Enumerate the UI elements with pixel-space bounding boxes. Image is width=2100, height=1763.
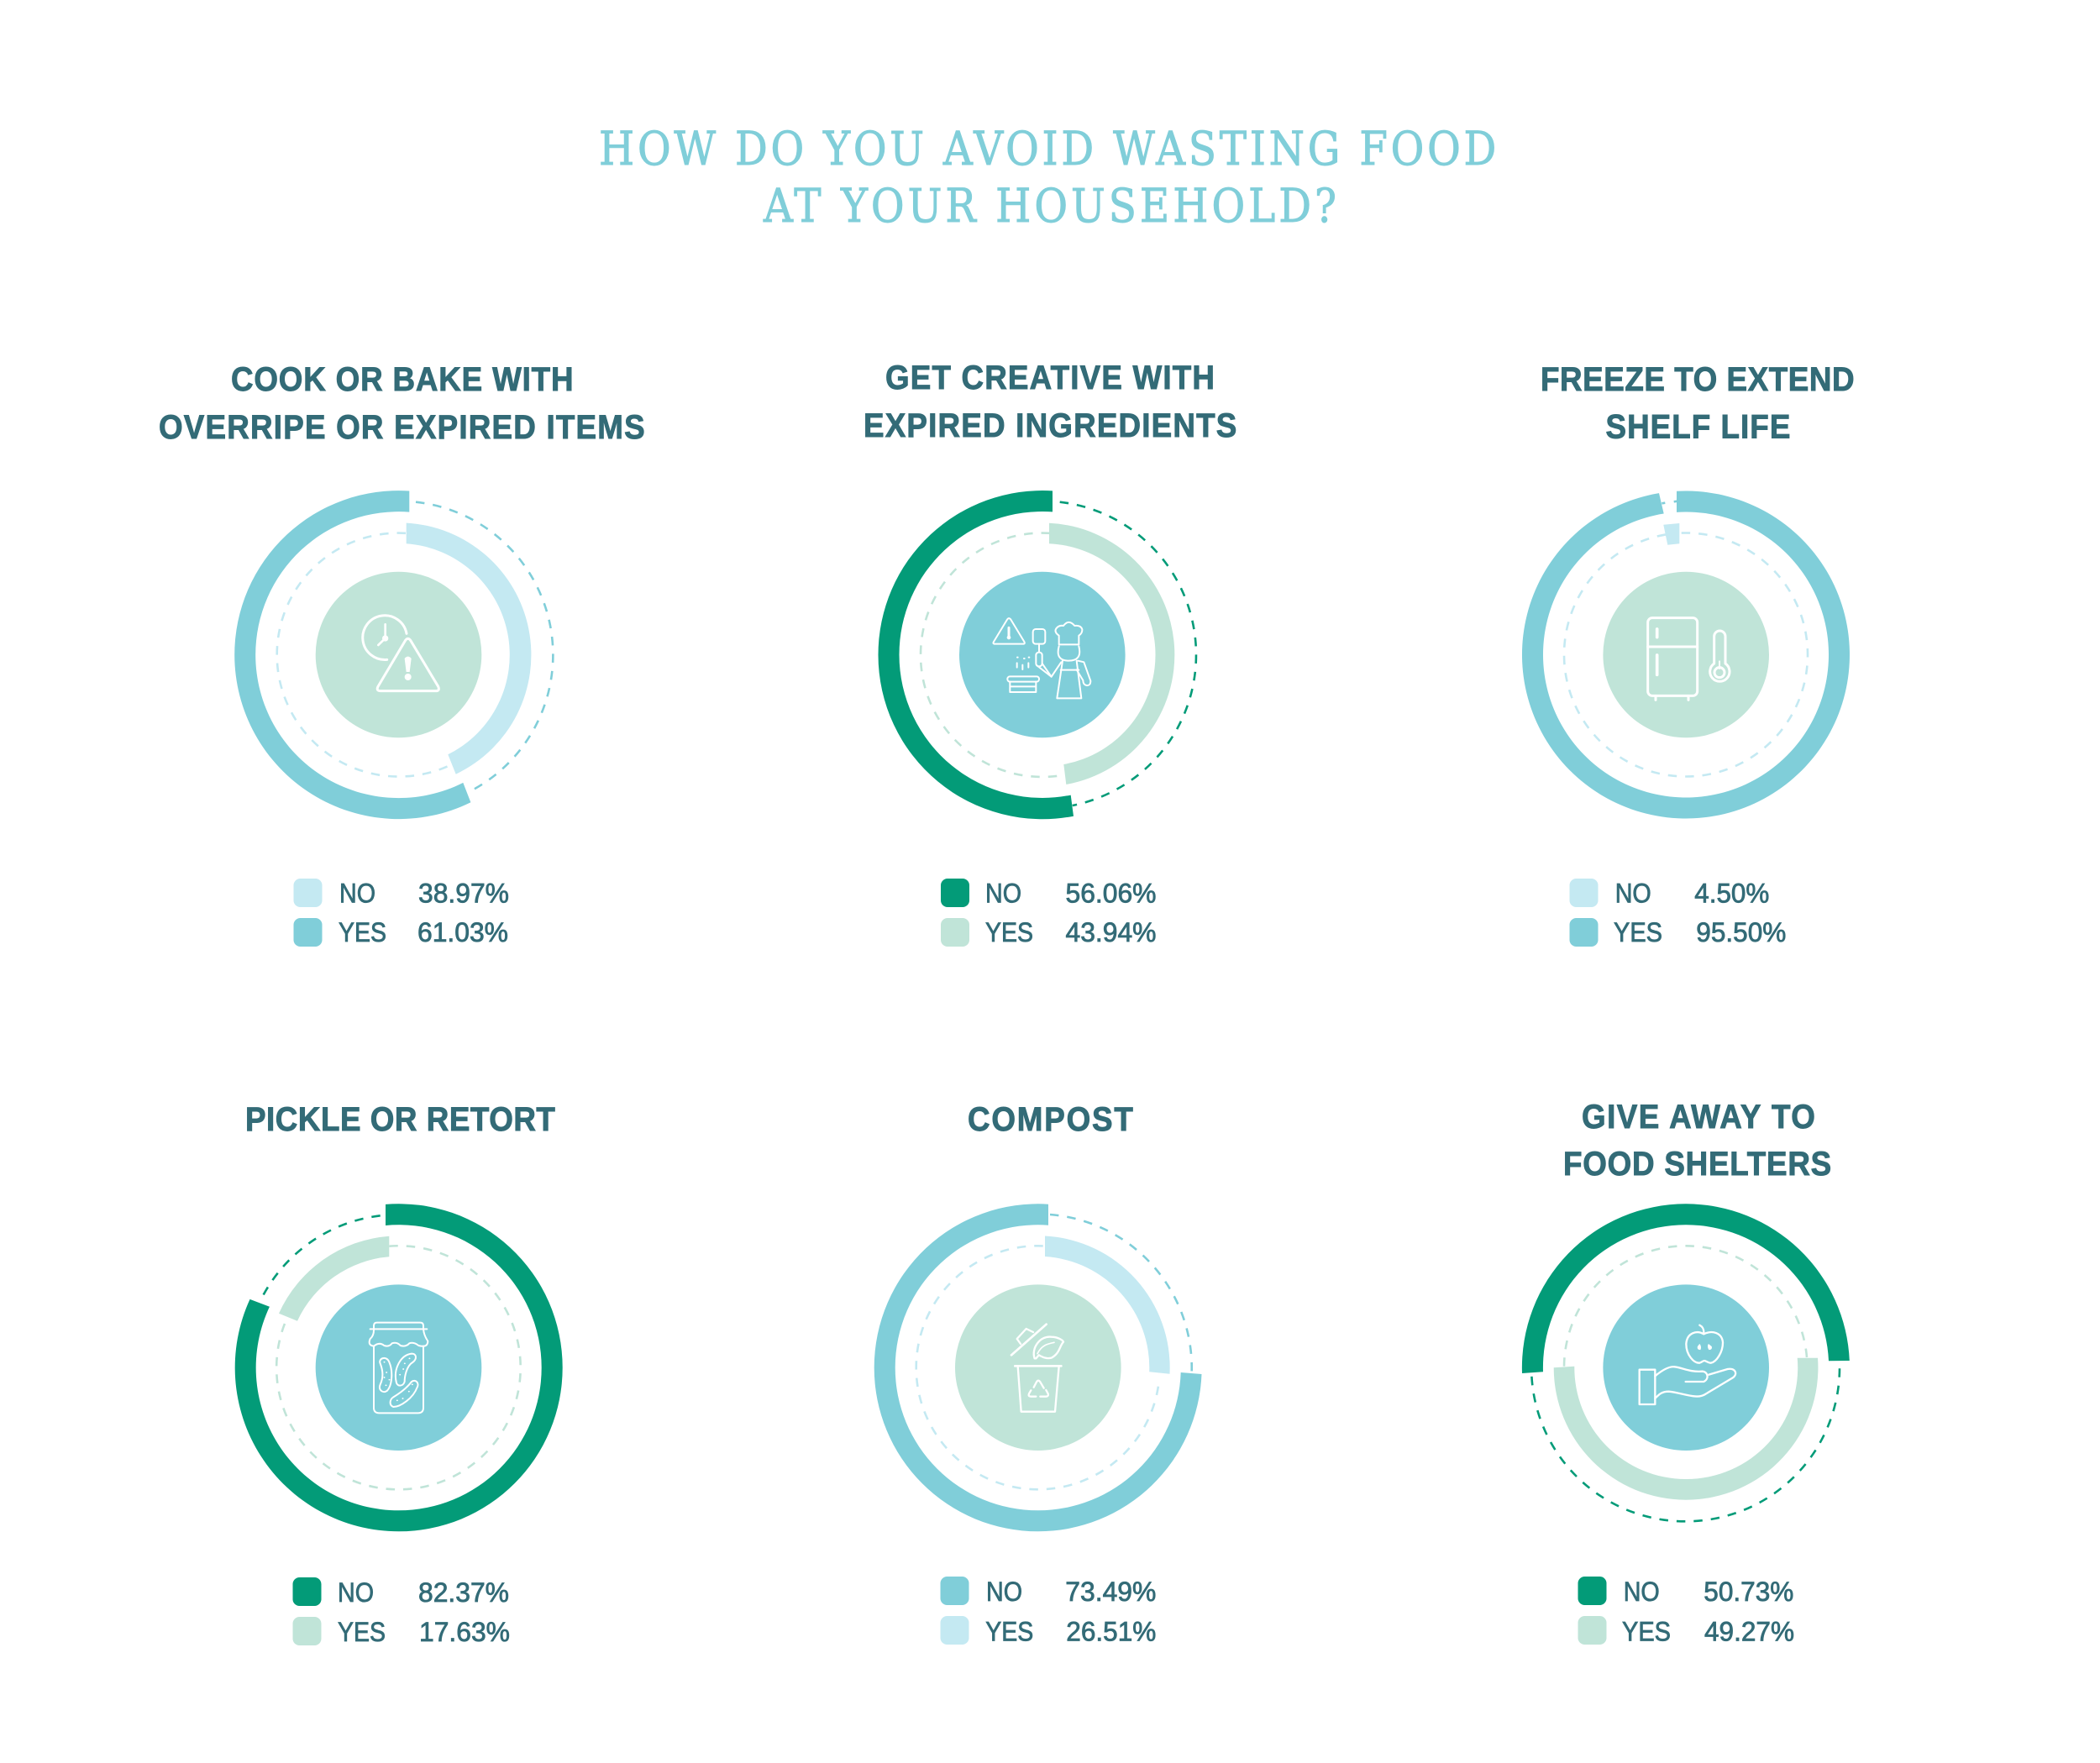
icon: hand with apple [1640,1325,1735,1404]
title: HOW DO YOU AVOID WASTING FOOD [599,123,1496,176]
legend: freeze: NO [1615,878,1651,908]
heading: freeze [1541,361,1855,446]
panel: get creative [864,359,1236,947]
heading: compost: COMPOST [968,1101,1133,1138]
donut chart: freeze [1522,491,1850,819]
legend: get creative: 43.94% [1065,917,1156,947]
legend: get creative: YES [985,917,1033,947]
heading: get creative: GET CREATIVE WITH [885,359,1215,396]
legend: freeze: YES [1614,917,1662,947]
icon: clock and warning [363,616,438,691]
legend: compost: 73.49% [1065,1577,1156,1607]
heading: give away: GIVE AWAY TO [1582,1099,1815,1136]
heading: get creative [864,359,1236,444]
legend: give away [1578,1577,1794,1646]
heading: freeze: SHELF LIFE [1606,408,1790,446]
heading: cook or bake [159,361,645,446]
legend: cook or bake: 61.03% [417,917,508,947]
panel: compost [874,1101,1201,1646]
donut chart: give away [1522,1204,1850,1521]
legend: pickle: 17.63% [419,1617,510,1647]
icon: compost bin [1011,1325,1063,1412]
legend: cook or bake: 38.97% [418,878,509,908]
panel: give away [1522,1099,1850,1646]
legend: pickle: YES [338,1617,386,1647]
legend: compost: 26.51% [1066,1616,1156,1646]
title [599,123,1496,233]
icon: pickle jar [370,1323,428,1413]
legend: pickle: NO [338,1577,374,1608]
legend: give away: 49.27% [1704,1616,1794,1646]
heading: get creative: EXPIRED INGREDIENTS [864,407,1236,444]
legend: cook or bake: YES [339,917,386,947]
legend: cook or bake: NO [339,878,375,908]
icon: chef with warning [993,618,1090,698]
heading: give away [1563,1099,1831,1183]
panel: pickle [235,1101,563,1647]
legend: compost: NO [986,1577,1022,1607]
legend: pickle: 82.37% [418,1577,509,1608]
heading: give away: FOOD SHELTERS [1563,1146,1831,1183]
icon: fridge and thermometer [1648,618,1730,700]
donut chart: cook or bake [234,491,553,819]
legend: give away: 50.73% [1704,1577,1793,1607]
legend: give away: NO [1624,1577,1660,1607]
legend: cook or bake [294,878,509,947]
legend: compost [941,1577,1156,1646]
legend: get creative: NO [985,878,1021,908]
heading: pickle: PICKLE OR RETORT [245,1101,555,1138]
heading: cook or bake: OVERRIPE OR EXPIRED ITEMS [159,409,645,446]
panel: cook or bake [159,361,645,947]
title: AT YOUR HOUSEHOLD? [763,180,1336,233]
donut chart: get creative [878,491,1196,819]
legend: freeze: 95.50% [1696,917,1786,947]
legend: get creative [941,878,1156,947]
legend: pickle [292,1577,510,1647]
legend: get creative: 56.06% [1065,878,1156,908]
legend: freeze [1569,878,1786,947]
heading: freeze: FREEZE TO EXTEND [1541,361,1855,398]
panel: freeze [1522,361,1855,947]
donut chart: compost [874,1204,1201,1531]
heading: cook or bake: COOK OR BAKE WITH [231,361,574,398]
legend: give away: YES [1622,1616,1671,1646]
legend: compost: YES [985,1616,1033,1646]
donut chart: pickle [235,1204,563,1531]
legend: freeze: 4.50% [1694,878,1769,908]
